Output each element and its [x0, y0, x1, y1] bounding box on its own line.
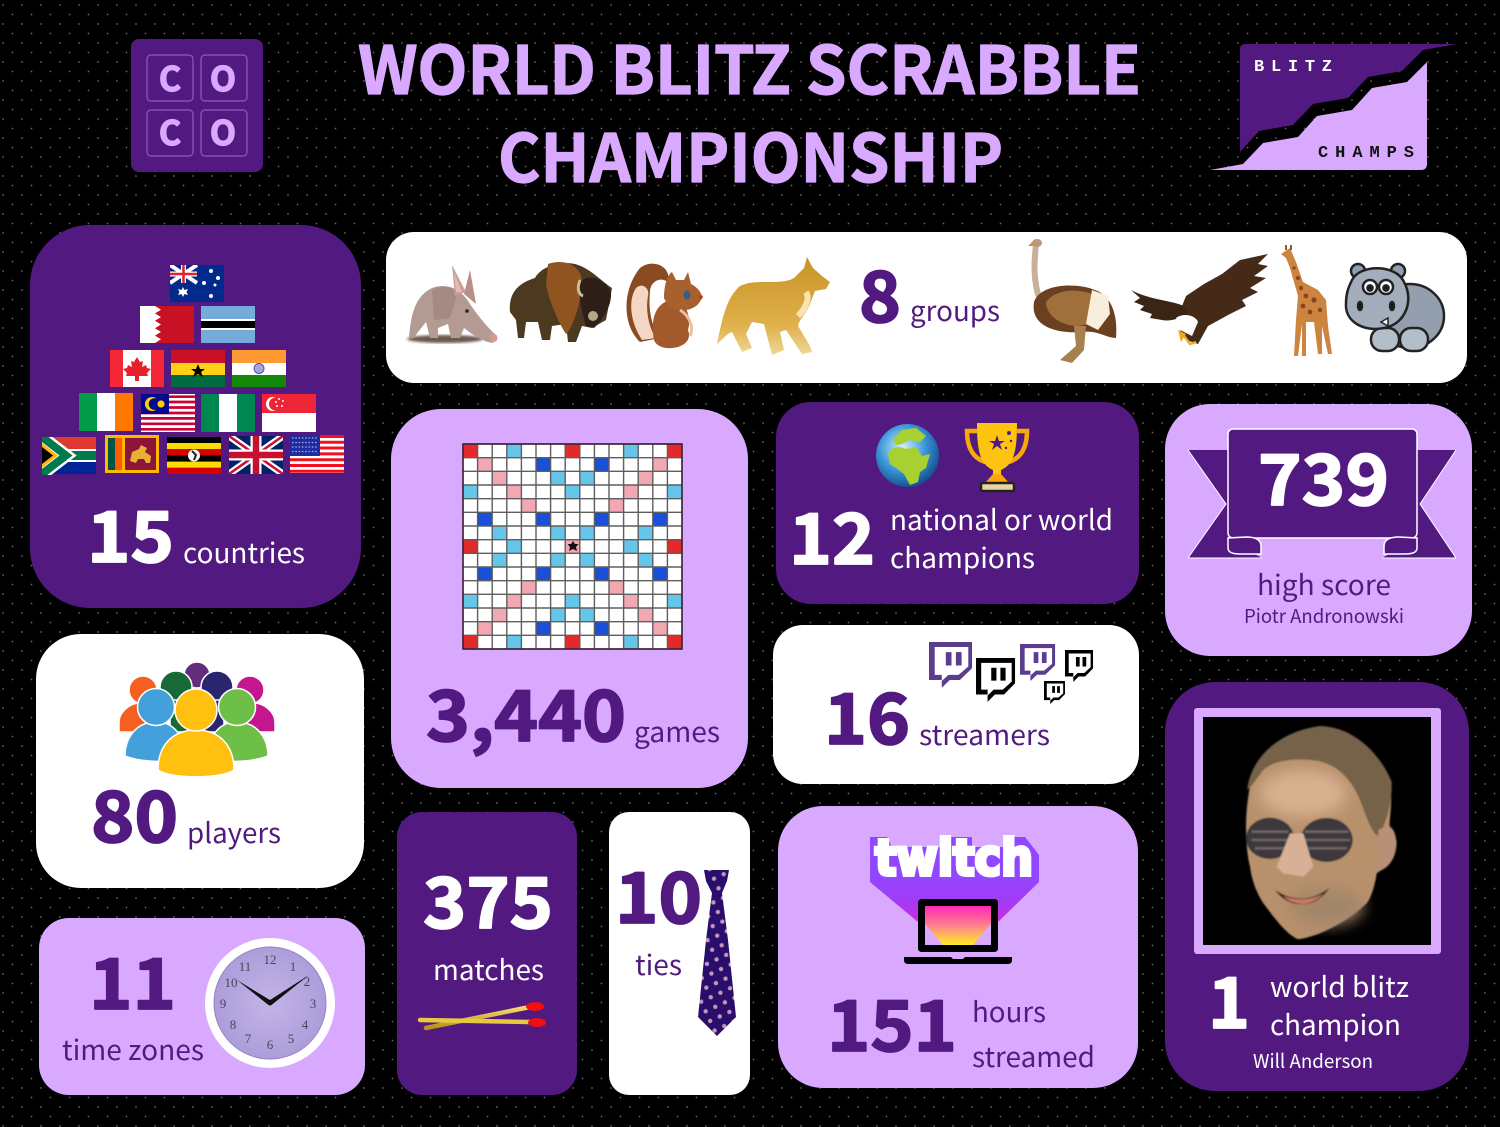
stat: 8 groups: 8: [859, 242, 901, 343]
stat: 1 world blitz champion: [1208, 948, 1409, 1074]
icon: clock: 5: [288, 1031, 294, 1046]
icon: ostrich: [1028, 239, 1116, 363]
logo: COCO tiles: [131, 39, 263, 172]
icon: dingo: [717, 257, 830, 355]
icon: clock: 8: [230, 1017, 236, 1032]
stat: 80 players: [91, 762, 281, 863]
icon: clock: [205, 938, 335, 1068]
icon: clock: 7: [245, 1031, 252, 1046]
stat: 10 ties: ties: [635, 944, 682, 984]
panel: 16 streamers: [773, 625, 1139, 784]
label: high score: high score: [1257, 564, 1391, 604]
stat: 1 world blitz champion: world blitz: [1270, 966, 1409, 1006]
stat: 16 streamers: 16: [824, 664, 910, 765]
label: high score: Piotr Andronowski: [1244, 602, 1404, 629]
icon: clock: 1: [290, 959, 296, 974]
title: WORLD BLITZ SCRABBLE: [358, 18, 1141, 114]
logo: COCO tiles: O: [210, 106, 236, 155]
stat: 15 countries: countries: [183, 532, 305, 572]
icon: ribbon: [1188, 429, 1456, 558]
stat: 80 players: players: [187, 812, 281, 852]
panel: 10 ties: [609, 812, 750, 1095]
icon: twitch logo projected from laptop: twitch: [875, 829, 1033, 887]
stat: 80 players: 80: [91, 762, 178, 863]
panel: 15 countries: [30, 225, 361, 608]
logo: COCO tiles: C: [159, 106, 181, 155]
panel: 1 world blitz champion: [1165, 682, 1469, 1091]
stat: 16 streamers: streamers: [919, 714, 1050, 754]
stat: 10 ties: [615, 843, 702, 984]
icon: necktie: [698, 870, 736, 1036]
stat: 8 groups: [859, 242, 1000, 343]
icon: twitch glitch cluster: [929, 642, 1093, 704]
title: CHAMPIONSHIP: [498, 106, 1003, 202]
label: high score: [1244, 564, 1404, 629]
stat: 3,440 games: games: [634, 711, 720, 751]
icon: aardvark: [407, 265, 498, 343]
flags pyramid: [38, 265, 344, 477]
stat: 12 national or world champions: national or world: [890, 499, 1113, 539]
icon: twitch logo projected from laptop: [870, 829, 1039, 964]
icon: clock: 4: [302, 1017, 309, 1032]
stat: 10 ties: 10: [615, 843, 702, 944]
logo: Blitz Champs: [1210, 44, 1457, 170]
photo: Will Anderson: [1194, 708, 1441, 954]
icon: clock: 12: [264, 952, 276, 967]
stat: 1 world blitz champion: 1: [1208, 948, 1250, 1049]
stat: 12 national or world champions: champions: [890, 537, 1035, 577]
stat: 3,440 games: 3,440: [426, 661, 626, 762]
stat: 1 world blitz champion: Will Anderson: [1253, 1047, 1373, 1074]
stat: 375 matches: [423, 848, 553, 989]
stat: 151 hours streamed: hours: [972, 991, 1046, 1031]
stat: 8 groups: groups: [910, 290, 1000, 330]
stat: 1 world blitz champion: champion: [1270, 1004, 1401, 1044]
icon: eagle: [1131, 254, 1268, 344]
panel: 12 champions: [776, 402, 1139, 604]
logo: Blitz Champs: BLITZ: [1254, 58, 1332, 77]
stat: 12 national or world champions: [789, 484, 1113, 585]
stat: 151 hours streamed: streamed: [972, 1036, 1095, 1076]
logo: Blitz Champs: CHAMPS: [1318, 144, 1414, 163]
stat: 12 national or world champions: 12: [789, 484, 875, 585]
stat: 375 matches: matches: [433, 949, 544, 989]
icon: clock: 6: [267, 1037, 274, 1052]
icon: squirrel: [626, 264, 703, 348]
stat: 375 matches: 375: [423, 848, 553, 949]
panel: 80 players: [36, 634, 364, 888]
stat: 16 streamers: [824, 664, 1050, 765]
stat: 15 countries: [87, 482, 305, 583]
stat: 11 time zones: time zones: [62, 1029, 204, 1069]
stat: 15 countries: 15: [87, 482, 174, 583]
icon: matchsticks: [420, 1002, 546, 1028]
stat: 151 hours streamed: [827, 971, 1095, 1076]
panel: 739 high score: [1165, 404, 1472, 656]
chart: scrabble board: [463, 444, 682, 649]
logo: COCO tiles: C: [159, 52, 181, 101]
panel: 8 groups: [386, 232, 1467, 383]
panel: 3,440 games: [391, 409, 748, 788]
icon: clock: 3: [310, 996, 316, 1011]
panel: 375 matches: [397, 812, 577, 1095]
stat: 151 hours streamed: 151: [827, 971, 957, 1072]
stat: 739: 739: [1258, 425, 1389, 526]
stat: 3,440 games: [426, 661, 720, 762]
logo: COCO tiles: O: [210, 52, 236, 101]
icon: clock: 2: [304, 974, 310, 989]
icon: trophy: [967, 423, 1027, 491]
icon: clock: 10: [224, 975, 238, 990]
icon: clock: 11: [239, 959, 251, 974]
stat: 11 time zones: [62, 929, 204, 1069]
title: [358, 18, 1141, 202]
icon: people group: [119, 662, 275, 777]
icon: bison: [510, 262, 612, 342]
icon: globe: [876, 424, 939, 487]
panel: 11 time zones: [39, 918, 365, 1095]
stat: 11 time zones: 11: [89, 929, 176, 1030]
icon: clock: 9: [220, 996, 226, 1011]
panel: 151 hours streamed: [778, 806, 1138, 1088]
icon: hippo: [1346, 264, 1444, 351]
icon: giraffe: [1281, 245, 1332, 356]
